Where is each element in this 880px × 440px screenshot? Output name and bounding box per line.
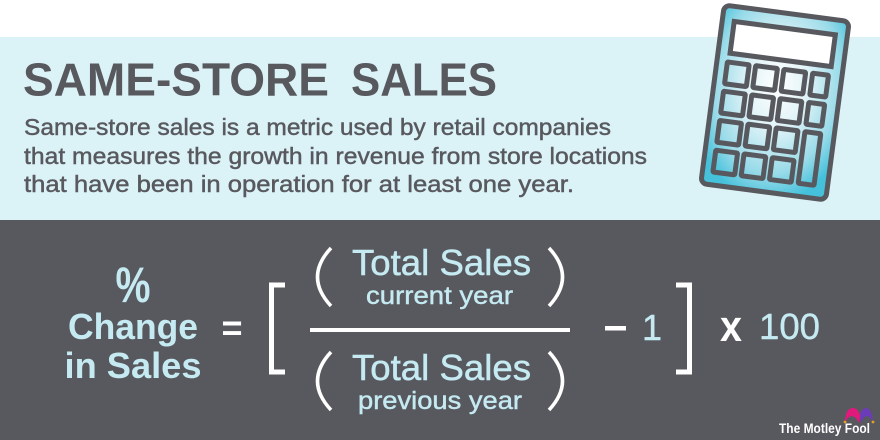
denominator: Total Sales	[352, 347, 531, 388]
label: percent change in sales: %	[116, 257, 150, 313]
left bracket	[272, 285, 285, 372]
numerator	[318, 242, 562, 310]
number one: 1	[642, 307, 662, 348]
equals sign: =	[221, 307, 243, 348]
label: percent change in sales: in Sales	[64, 345, 201, 386]
description text: that measures the growth in revenue from store locations	[24, 143, 647, 169]
minus sign	[605, 326, 626, 330]
logo: The Motley Fool	[779, 408, 874, 436]
panel: formula	[0, 220, 880, 440]
description text: that have been in operation for at least one year.	[24, 171, 574, 197]
number 100: 100	[759, 306, 820, 347]
title	[23, 54, 497, 106]
fraction line	[310, 328, 570, 332]
multiply sign: x	[720, 302, 742, 351]
white top strip	[0, 0, 880, 37]
description text	[24, 114, 647, 197]
description text: Same-store sales is a metric used by retail companies	[24, 114, 611, 140]
denominator: previous year	[358, 387, 522, 415]
title: SALES	[351, 54, 497, 106]
right bracket	[676, 285, 690, 372]
title: SAME-STORE	[23, 54, 329, 106]
label: percent change in sales: Change	[68, 306, 198, 347]
logo: The Motley Fool: The Motley Fool	[779, 421, 870, 436]
label: percent change in sales	[64, 257, 201, 386]
numerator: current year	[366, 282, 513, 310]
icon: calculator	[701, 5, 849, 200]
numerator: Total Sales	[352, 242, 531, 283]
denominator	[318, 347, 562, 415]
panel: definition	[0, 37, 880, 220]
